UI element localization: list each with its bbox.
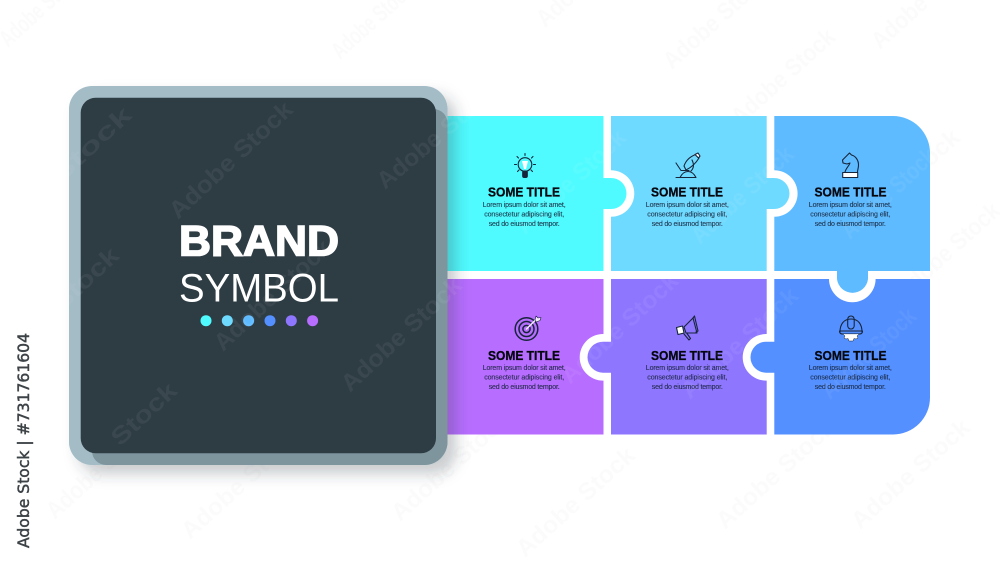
icon: hard hat with gear	[840, 316, 862, 341]
text: Adobe Stock	[726, 23, 841, 130]
card long shadow	[92, 109, 448, 465]
description: consectetur adipiscing elit,	[647, 374, 727, 382]
icon: chess knight	[842, 153, 858, 178]
icon: microscope telescope	[676, 153, 700, 178]
title: SOME TITLE	[488, 348, 560, 363]
description: sed do eiusmod tempor.	[489, 221, 560, 228]
text: Adobe Stock	[511, 124, 632, 239]
panel: violet puzzle piece	[588, 279, 767, 434]
text: Stock	[46, 101, 138, 189]
panel: purple puzzle piece	[440, 279, 604, 434]
text: Adobe Stock	[41, 417, 156, 524]
panel: brand symbol card	[69, 86, 448, 465]
panel: sky puzzle piece	[611, 116, 790, 271]
icon: target with arrow	[515, 316, 541, 340]
text: Adobe Stock	[556, 267, 684, 389]
description: sed do eiusmod tempor.	[815, 221, 886, 228]
description: Lorem ipsum dolor sit amet,	[483, 365, 566, 372]
description: Lorem ipsum dolor sit amet,	[646, 365, 729, 372]
title: SOME TITLE	[488, 185, 560, 200]
text: Adobe Stock	[711, 414, 841, 534]
text: Adobe Stock	[372, 77, 504, 195]
description: consectetur adipiscing elit,	[810, 212, 890, 218]
description: sed do eiusmod tempor.	[815, 384, 886, 391]
text: Adobe Stock	[816, 302, 922, 404]
description: consectetur adipiscing elit,	[647, 212, 727, 218]
description: sed do eiusmod tempor.	[652, 221, 723, 228]
text: Adobe Stock	[686, 141, 800, 249]
puzzle panel grid	[440, 116, 930, 434]
card dark face	[81, 98, 436, 453]
text: Adobe Stock	[209, 234, 337, 356]
text: Stock	[106, 377, 183, 451]
description: consectetur adipiscing elit,	[484, 212, 564, 218]
panel: light blue puzzle piece	[774, 116, 930, 293]
text: Adobe Stock	[176, 424, 306, 544]
card outer frame	[69, 86, 448, 465]
title: SOME TITLE	[814, 348, 887, 363]
description: Lorem ipsum dolor sit amet,	[646, 202, 729, 209]
text: Adobe Stock	[511, 442, 641, 562]
description: Lorem ipsum dolor sit amet,	[809, 202, 892, 209]
step 5 content	[646, 316, 729, 391]
text: Adobe Stock	[676, 282, 804, 404]
icon: light bulb	[514, 154, 536, 178]
step 6 content	[809, 316, 892, 391]
step 3 content	[809, 153, 892, 228]
panel: royal blue puzzle piece	[750, 279, 930, 434]
description: Lorem ipsum dolor sit amet,	[809, 365, 892, 372]
description: sed do eiusmod tempor.	[652, 384, 723, 391]
description: consectetur adipiscing elit,	[810, 374, 890, 382]
text: Adobe Stock	[386, 406, 516, 526]
title: SOME TITLE	[814, 185, 887, 200]
brand subheading: SYMBOL	[179, 266, 339, 310]
icon: megaphone	[676, 316, 698, 340]
title: SOME TITLE	[651, 185, 723, 200]
step 1 content	[483, 154, 566, 228]
text: Adobe Stock	[836, 124, 966, 244]
colour dots	[200, 315, 318, 326]
text: Adobe Stock	[846, 414, 976, 534]
step 2 content	[646, 153, 729, 228]
description: consectetur adipiscing elit,	[484, 374, 564, 382]
description: sed do eiusmod tempor.	[489, 384, 560, 391]
text: Adobe Stock	[836, 142, 942, 244]
description: Lorem ipsum dolor sit amet,	[483, 202, 566, 209]
brand heading: BRAND	[179, 218, 339, 266]
step 4 content	[483, 316, 566, 391]
text: Adobe Stock	[164, 96, 299, 224]
title: SOME TITLE	[651, 348, 723, 363]
panel: cyan puzzle piece	[440, 116, 626, 271]
side credit text: Adobe Stock | #731761604	[14, 333, 33, 548]
text: Stock	[48, 242, 125, 316]
text: Adobe Stock	[336, 271, 468, 397]
